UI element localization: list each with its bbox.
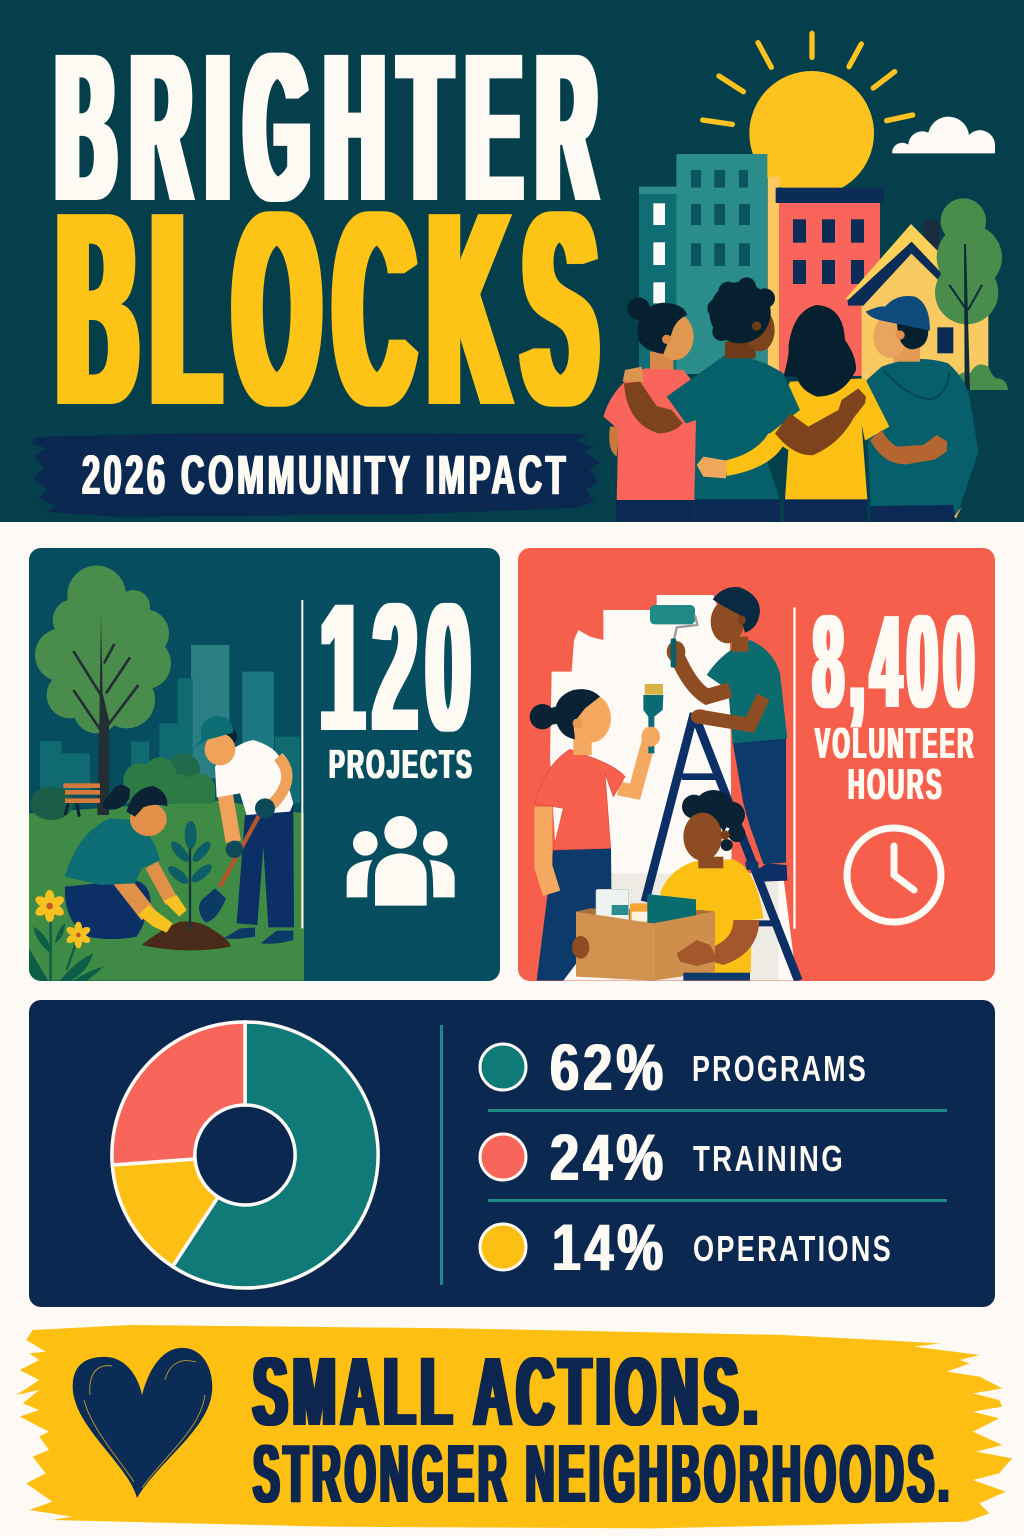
panel: budget breakdown <box>29 1000 995 1307</box>
skyline <box>40 645 300 803</box>
tree <box>35 566 171 815</box>
segment: programs <box>173 1022 378 1288</box>
subtitle banner <box>32 433 600 517</box>
icon: clock <box>847 828 941 922</box>
segment: operations <box>112 1159 218 1266</box>
painting illustration <box>530 587 798 981</box>
coral building <box>768 177 884 377</box>
header panel <box>0 0 1024 522</box>
bushes <box>30 753 215 820</box>
painter on ladder <box>650 587 787 882</box>
legend row: programs <box>480 1030 868 1104</box>
house <box>845 220 988 390</box>
sun with rays <box>703 33 913 196</box>
bench <box>63 783 100 817</box>
legend row: operations: 14% <box>552 1210 667 1284</box>
panel: 120 projects <box>29 548 500 981</box>
woman with brush <box>530 684 663 981</box>
painted wall <box>550 595 797 981</box>
person in yellow shirt <box>767 305 947 522</box>
panel background <box>518 548 995 981</box>
panel background <box>29 548 500 981</box>
brush stroke <box>32 433 600 517</box>
legend row: operations: OPERATIONS <box>693 1228 893 1269</box>
ladder <box>645 713 798 981</box>
subtitle text: 2026 COMMUNITY IMPACT <box>82 443 569 506</box>
icon: people <box>347 816 455 906</box>
legend row: programs: 62% <box>550 1030 667 1104</box>
lawn <box>29 801 304 981</box>
brush stroke <box>16 1325 1012 1528</box>
tree <box>935 198 1008 390</box>
divider line <box>793 607 796 929</box>
label: projects: PROJECTS <box>329 741 474 787</box>
kid with box <box>572 790 763 981</box>
volunteer woman planting <box>65 785 187 939</box>
legend row: programs: PROGRAMS <box>692 1048 868 1089</box>
person in teal shirt with arms around friends <box>623 277 866 522</box>
hero illustration <box>603 33 1008 522</box>
flowers <box>29 890 103 981</box>
legend row: training: TRAINING <box>693 1138 845 1179</box>
text: 120 <box>320 565 479 769</box>
panel: 8,400 volunteer hours <box>518 548 995 981</box>
legend row: training: 24% <box>550 1120 667 1194</box>
sapling in soil <box>142 821 231 950</box>
donut chart <box>112 1022 378 1288</box>
person with cap and hoodie <box>866 296 978 522</box>
panel background <box>29 1000 995 1307</box>
planting illustration <box>29 566 304 981</box>
legend row: operations <box>480 1210 893 1284</box>
cloud <box>892 117 995 153</box>
volunteer man with shovel <box>193 716 294 944</box>
person in coral shirt <box>603 297 697 522</box>
legend row: training <box>480 1120 845 1194</box>
divider line <box>301 600 303 928</box>
header background <box>0 0 1024 522</box>
segment: training <box>112 1022 245 1165</box>
chart divider <box>440 1025 443 1285</box>
teal buildings <box>639 154 767 374</box>
footer banner <box>16 1325 1012 1528</box>
icon: heart <box>73 1348 212 1498</box>
